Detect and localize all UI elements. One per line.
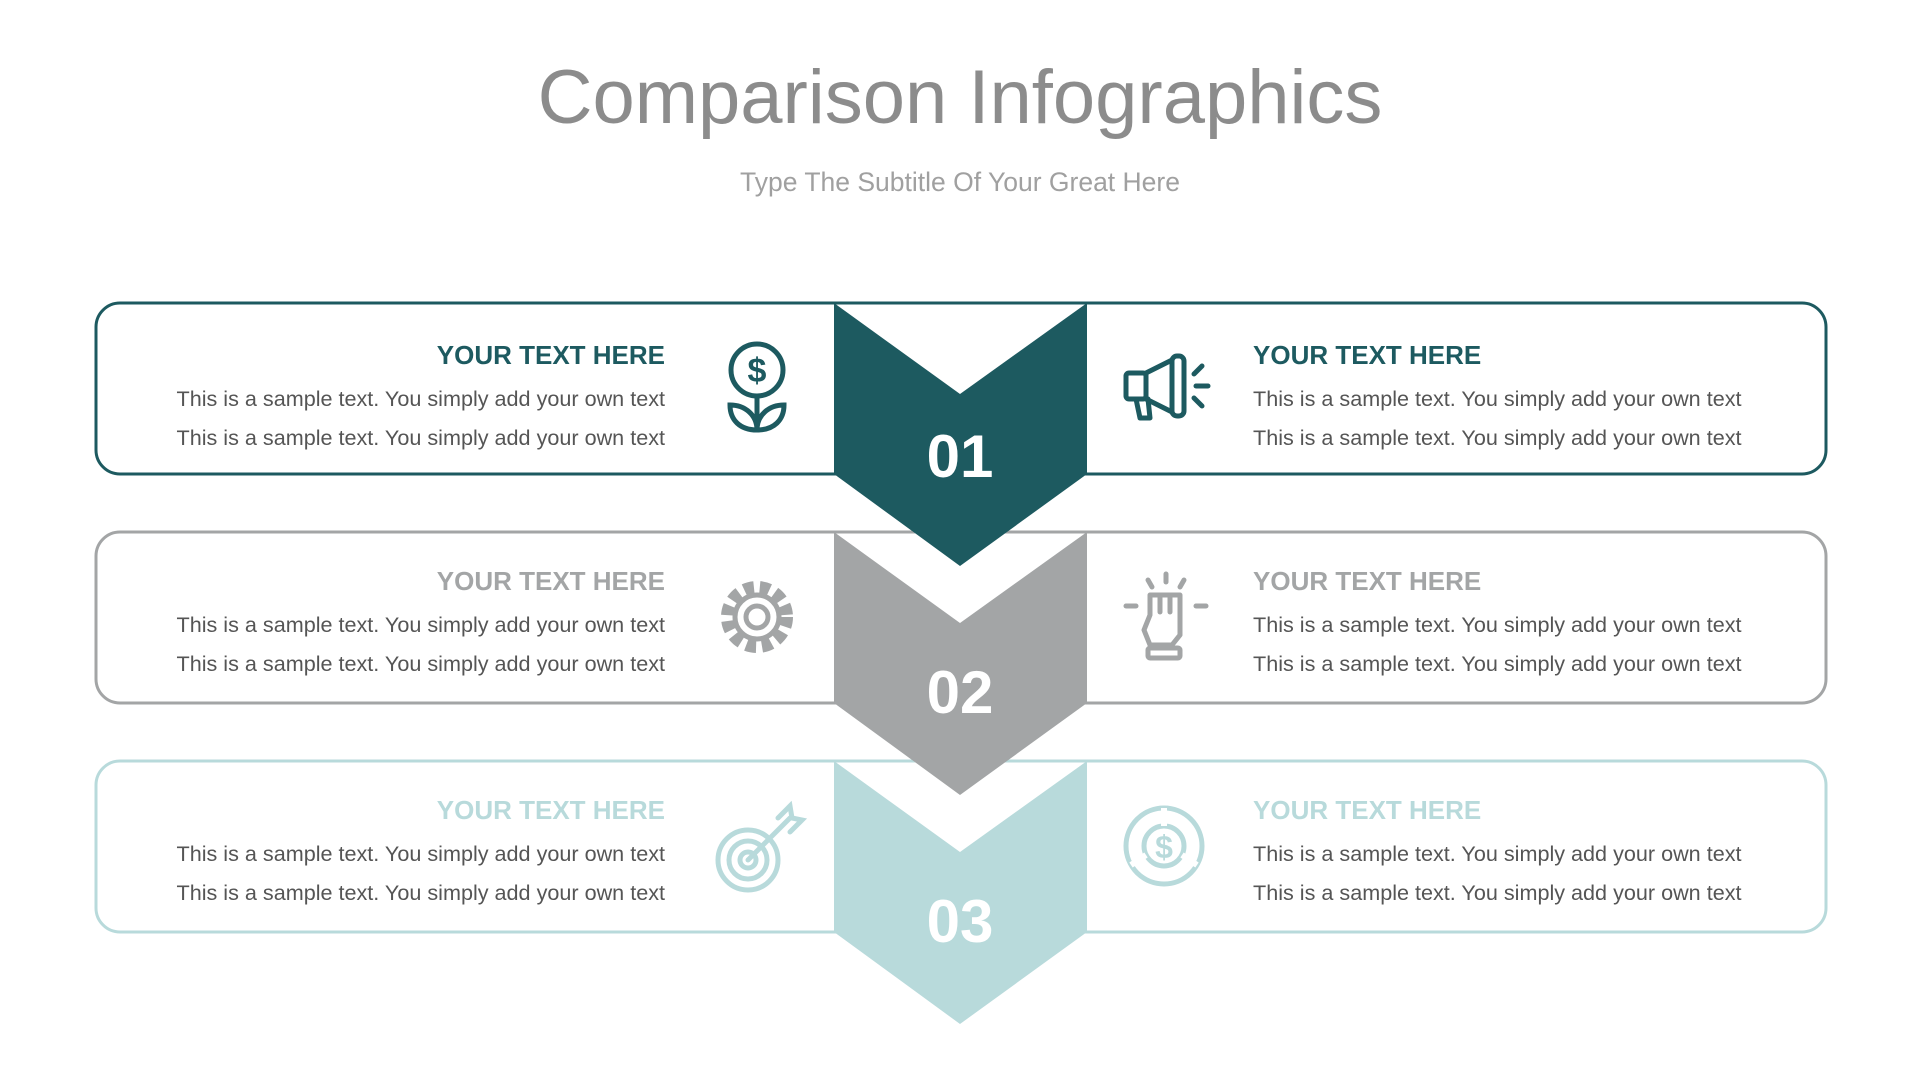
left text 2: This is a sample text. You simply add your own text (176, 651, 665, 676)
left text 2: This is a sample text. You simply add your own text (176, 612, 665, 637)
left text 3: YOUR TEXT HERE (437, 795, 665, 825)
right text 2: YOUR TEXT HERE (1253, 566, 1481, 596)
panel: row 3 box (96, 761, 1826, 932)
right text 1: This is a sample text. You simply add your own text (1253, 386, 1742, 411)
chevron 03 (834, 761, 1087, 1024)
icon: megaphone (1126, 356, 1208, 418)
icon: gear (727, 587, 787, 647)
left text 1 (176, 340, 665, 450)
icon: dollar chart: $ (1155, 829, 1173, 865)
right text 1: YOUR TEXT HERE (1253, 340, 1481, 370)
left text 1: This is a sample text. You simply add your own text (176, 386, 665, 411)
number 02: 02 (927, 659, 993, 726)
right text 2 (1253, 566, 1742, 676)
number 03: 03 (927, 888, 993, 955)
panel: row 2 box (96, 532, 1826, 703)
left text 2: YOUR TEXT HERE (437, 566, 665, 596)
title: Comparison Infographics (538, 55, 1382, 140)
icon: money plant (730, 344, 784, 430)
icon: money plant: $ (748, 352, 767, 390)
left text 1: This is a sample text. You simply add your own text (176, 425, 665, 450)
number 01: 01 (927, 423, 993, 490)
icon: target (718, 806, 802, 890)
right text 1 (1253, 340, 1742, 450)
right text 3: This is a sample text. You simply add your own text (1253, 880, 1742, 905)
right text 3: This is a sample text. You simply add your own text (1253, 841, 1742, 866)
left text 3: This is a sample text. You simply add your own text (176, 841, 665, 866)
right text 1: This is a sample text. You simply add your own text (1253, 425, 1742, 450)
icon: fist (1126, 574, 1206, 658)
right text 3 (1253, 795, 1742, 905)
panel: row 1 box (96, 303, 1826, 474)
left text 3 (176, 795, 665, 905)
right text 2: This is a sample text. You simply add your own text (1253, 612, 1742, 637)
left text 2 (176, 566, 665, 676)
right text 2: This is a sample text. You simply add your own text (1253, 651, 1742, 676)
chevron 01 (834, 303, 1087, 566)
left text 1: YOUR TEXT HERE (437, 340, 665, 370)
icon: dollar chart (1126, 808, 1202, 884)
subtitle: Type The Subtitle Of Your Great Here (740, 167, 1180, 197)
chevron 02 (834, 532, 1087, 795)
left text 3: This is a sample text. You simply add your own text (176, 880, 665, 905)
right text 3: YOUR TEXT HERE (1253, 795, 1481, 825)
